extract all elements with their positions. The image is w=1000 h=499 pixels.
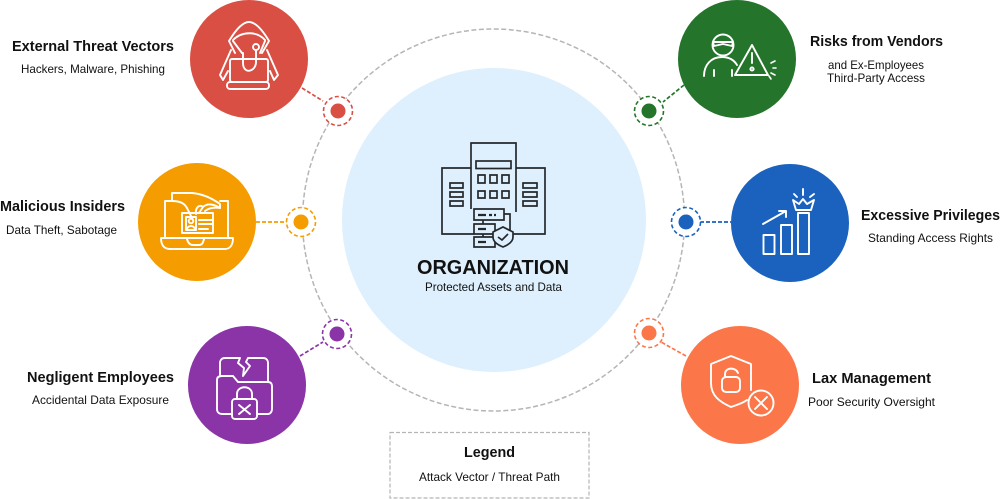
- central dashed ring: [302, 29, 684, 411]
- icon: shield with open lock and x: [711, 356, 774, 416]
- subtitle: organization: Protected Assets and Data: [425, 281, 563, 294]
- description: Third-Party Access: [827, 72, 925, 85]
- description: Standing Access Rights: [868, 232, 993, 245]
- description: Hackers, Malware, Phishing: [21, 63, 165, 76]
- icon: rising bars with crown: [763, 189, 814, 254]
- heading: Lax Management: [812, 371, 931, 387]
- heading: External Threat Vectors: [12, 39, 174, 55]
- connector and node: [300, 320, 352, 356]
- heading: Malicious Insiders: [0, 199, 125, 215]
- panel: organization core: [342, 68, 646, 372]
- description: [827, 59, 925, 85]
- circle: [678, 0, 796, 118]
- icon: broken folder with lock: [217, 358, 272, 419]
- legend title: Legend: [464, 445, 515, 461]
- circle: [731, 164, 849, 282]
- circle: [190, 0, 308, 118]
- icon: office buildings with secured server: [442, 143, 545, 247]
- connector and node: [634, 85, 684, 126]
- icon: hooded hacker with laptop: [220, 22, 278, 89]
- connector and node: [634, 318, 686, 356]
- legend: [390, 432, 589, 498]
- icon: masked person with warning: [704, 34, 776, 79]
- legend entry: Attack Vector / Threat Path: [419, 471, 560, 484]
- description: Poor Security Oversight: [808, 396, 936, 409]
- heading: Excessive Privileges: [861, 208, 1000, 224]
- description: Data Theft, Sabotage: [6, 224, 117, 237]
- panel: malicious insiders: [0, 163, 316, 281]
- connector and node: [256, 208, 316, 236]
- panel: excessive privileges: [672, 164, 1000, 282]
- connector and node: [672, 208, 731, 236]
- circle: [681, 326, 799, 444]
- panel: lax management: [634, 318, 936, 444]
- heading: Risks from Vendors: [810, 34, 943, 50]
- title: organization: ORGANIZATION: [417, 256, 569, 279]
- panel: negligent employees: [27, 320, 352, 444]
- icon: laptop with stolen id card: [161, 193, 233, 249]
- panel: risks from vendors: [634, 0, 943, 126]
- description: Accidental Data Exposure: [32, 394, 169, 407]
- description: and Ex-Employees: [828, 59, 924, 72]
- connector and node: [302, 88, 352, 126]
- heading: Negligent Employees: [27, 370, 174, 386]
- circle: [188, 326, 306, 444]
- panel: external threat vectors: [12, 0, 352, 126]
- circle: [138, 163, 256, 281]
